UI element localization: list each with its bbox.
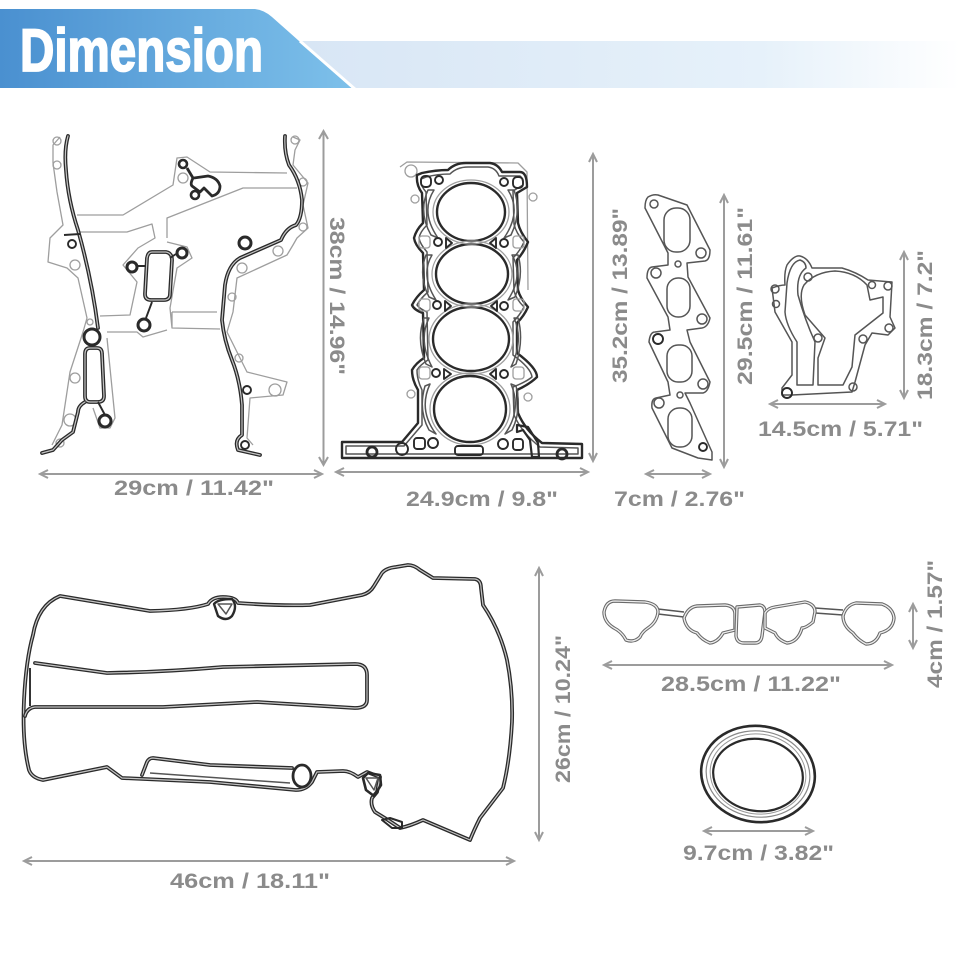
dimension: valve cover height (535, 568, 575, 840)
oil seal ring (695, 719, 821, 829)
gasket: valve cover (24, 565, 512, 840)
gasket: intake manifold (604, 601, 894, 644)
label: 9.7cm / 3.82" (683, 842, 834, 865)
dimension: intake manifold height (909, 560, 947, 688)
gasket: timing cover (42, 136, 308, 455)
dimension: seal width (683, 827, 834, 865)
label: 38cm / 14.96" (325, 217, 348, 375)
dimension: exhaust manifold width (614, 470, 745, 511)
dimension: timing cover height (319, 131, 348, 465)
label: 4cm / 1.57" (924, 560, 947, 688)
gasket: exhaust manifold (645, 195, 712, 460)
dimension: cylinder head width (336, 468, 588, 511)
label: 18.3cm / 7.2" (914, 250, 937, 400)
label: 14.5cm / 5.71" (758, 418, 923, 441)
dimension: cylinder head height (589, 154, 632, 461)
dimension: water pump width (758, 400, 923, 441)
gasket: cylinder head (342, 162, 582, 459)
label: 35.2cm / 13.89" (609, 208, 632, 383)
title: Dimension (20, 17, 263, 84)
label: 7cm / 2.76" (614, 488, 745, 511)
label: 28.5cm / 11.22" (661, 673, 841, 696)
dimension: intake manifold width (604, 661, 892, 696)
dimension: water pump height (900, 250, 937, 400)
label: 29cm / 11.42" (114, 477, 274, 500)
header banner (0, 9, 960, 90)
dimension: valve cover width (24, 857, 514, 893)
label: 29.5cm / 11.61" (734, 207, 757, 385)
dimension: timing cover width (40, 470, 322, 500)
label: 46cm / 18.11" (170, 870, 330, 893)
gasket: water pump (771, 256, 895, 398)
dimension: exhaust manifold height (720, 195, 757, 467)
label: 26cm / 10.24" (552, 635, 575, 783)
label: 24.9cm / 9.8" (406, 488, 558, 511)
